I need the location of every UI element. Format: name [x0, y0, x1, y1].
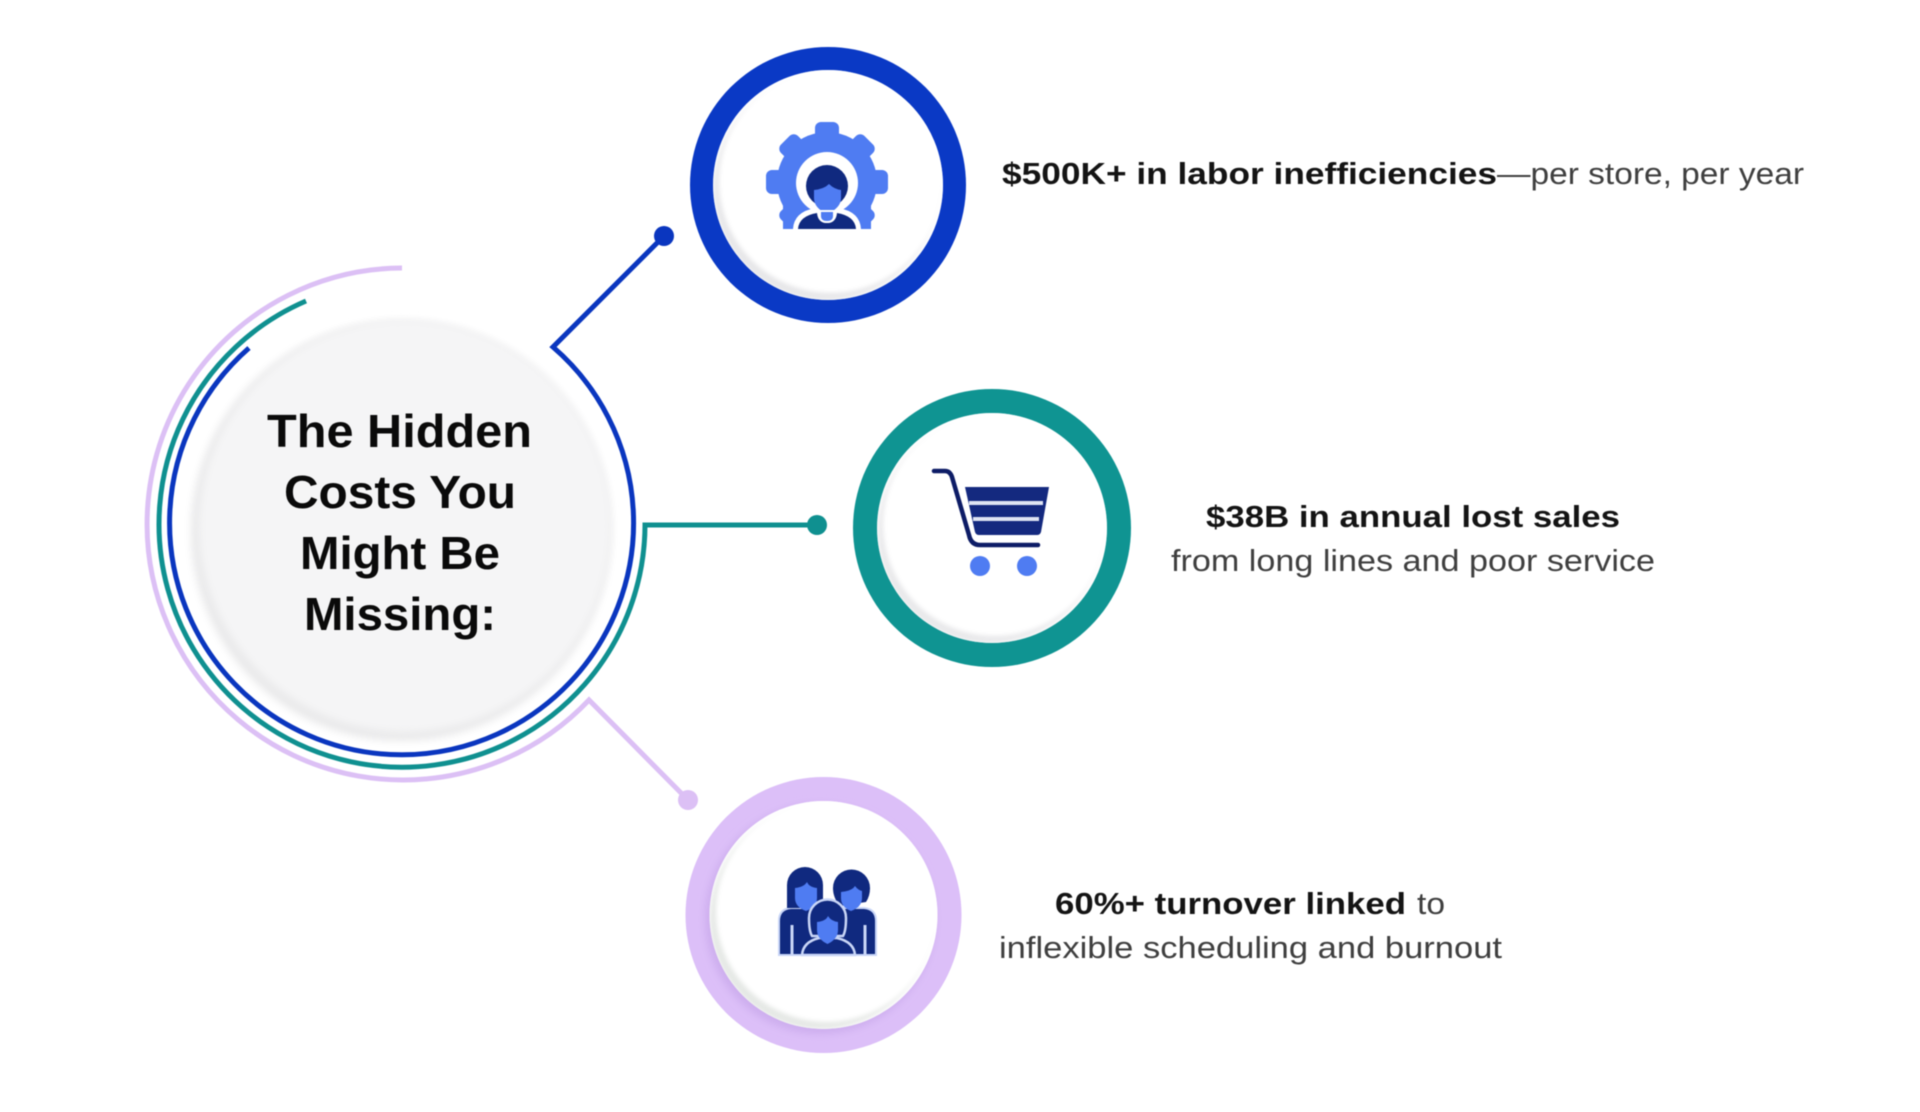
- back left person: [779, 867, 831, 955]
- text block: labor inefficiencies: —per store, per year: [1497, 156, 1804, 191]
- title: Missing:: [304, 588, 496, 640]
- lilac arc and connector: [147, 268, 698, 810]
- teal arc and connector: [159, 301, 827, 767]
- text block: turnover: 60%+ turnover linked: [1055, 886, 1406, 921]
- ring: [853, 389, 1131, 667]
- title: Costs You: [284, 466, 516, 518]
- text block: lost sales: $38B in annual lost sales: [1206, 499, 1620, 534]
- panel: central hub circle: [147, 226, 827, 810]
- title: The Hidden: [267, 405, 532, 457]
- back right person: [824, 870, 876, 955]
- panel: labor inefficiencies badge: [690, 47, 966, 323]
- panel: turnover badge: [686, 777, 962, 1053]
- icon: gear with person: [766, 122, 888, 242]
- ring: [690, 47, 966, 323]
- front person: [802, 900, 855, 955]
- ring: [686, 777, 962, 1053]
- title: [267, 405, 532, 640]
- panel: lost sales badge: [853, 389, 1131, 667]
- text block: labor inefficiencies: $500K+ in labor inefficiencies: [1002, 156, 1497, 191]
- text block: turnover: [999, 886, 1502, 965]
- icon: group of people: [779, 867, 876, 955]
- text block: lost sales: from long lines and poor service: [1171, 543, 1655, 578]
- text block: turnover: inflexible scheduling and burnout: [999, 930, 1502, 965]
- title: Might Be: [300, 527, 500, 579]
- icon: shopping cart: [934, 471, 1049, 576]
- text block: lost sales: [1171, 499, 1655, 578]
- hub disc: [191, 320, 611, 741]
- text block: turnover: to: [1417, 886, 1445, 921]
- blue arc and connector: [170, 226, 674, 755]
- text block: labor inefficiencies: [1002, 156, 1804, 191]
